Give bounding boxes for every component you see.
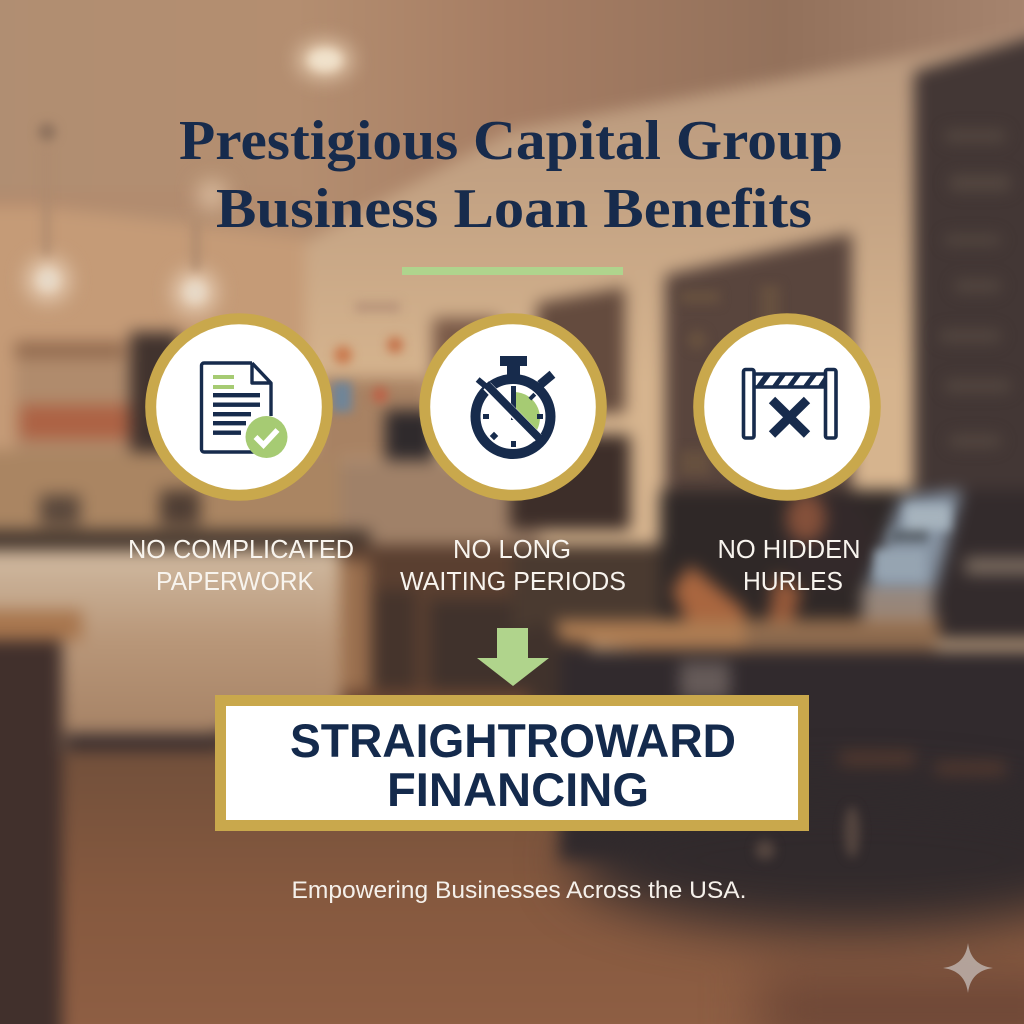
title [179,110,843,240]
label: no hidden hurdles: HURLES [743,568,843,596]
label: no long waiting periods: WAITING PERIODS [400,568,626,596]
label: no complicated paperwork: NO COMPLICATED [128,536,354,564]
label: no long waiting periods: NO LONG [453,536,571,564]
label: no hidden hurdles [718,536,860,596]
title: Prestigious Capital Group [179,110,843,172]
result box: STRAIGHTROWARD [290,714,736,767]
icon: barrier with X [699,319,875,495]
green title divider [402,267,623,275]
arrow: down to result [477,628,549,686]
label: no hidden hurdles: NO HIDDEN [718,536,860,564]
result box: FINANCING [387,763,649,816]
title: Business Loan Benefits [216,178,812,240]
label: no complicated paperwork [128,536,354,596]
icon: sparkle watermark [943,943,993,993]
result box [220,700,804,826]
icon: crossed-out stopwatch [425,319,601,495]
label: no complicated paperwork: PAPERWORK [156,568,314,596]
icon: document with check [151,319,327,495]
label: no long waiting periods [400,536,626,596]
tagline: Empowering Businesses Across the USA. [292,877,746,904]
